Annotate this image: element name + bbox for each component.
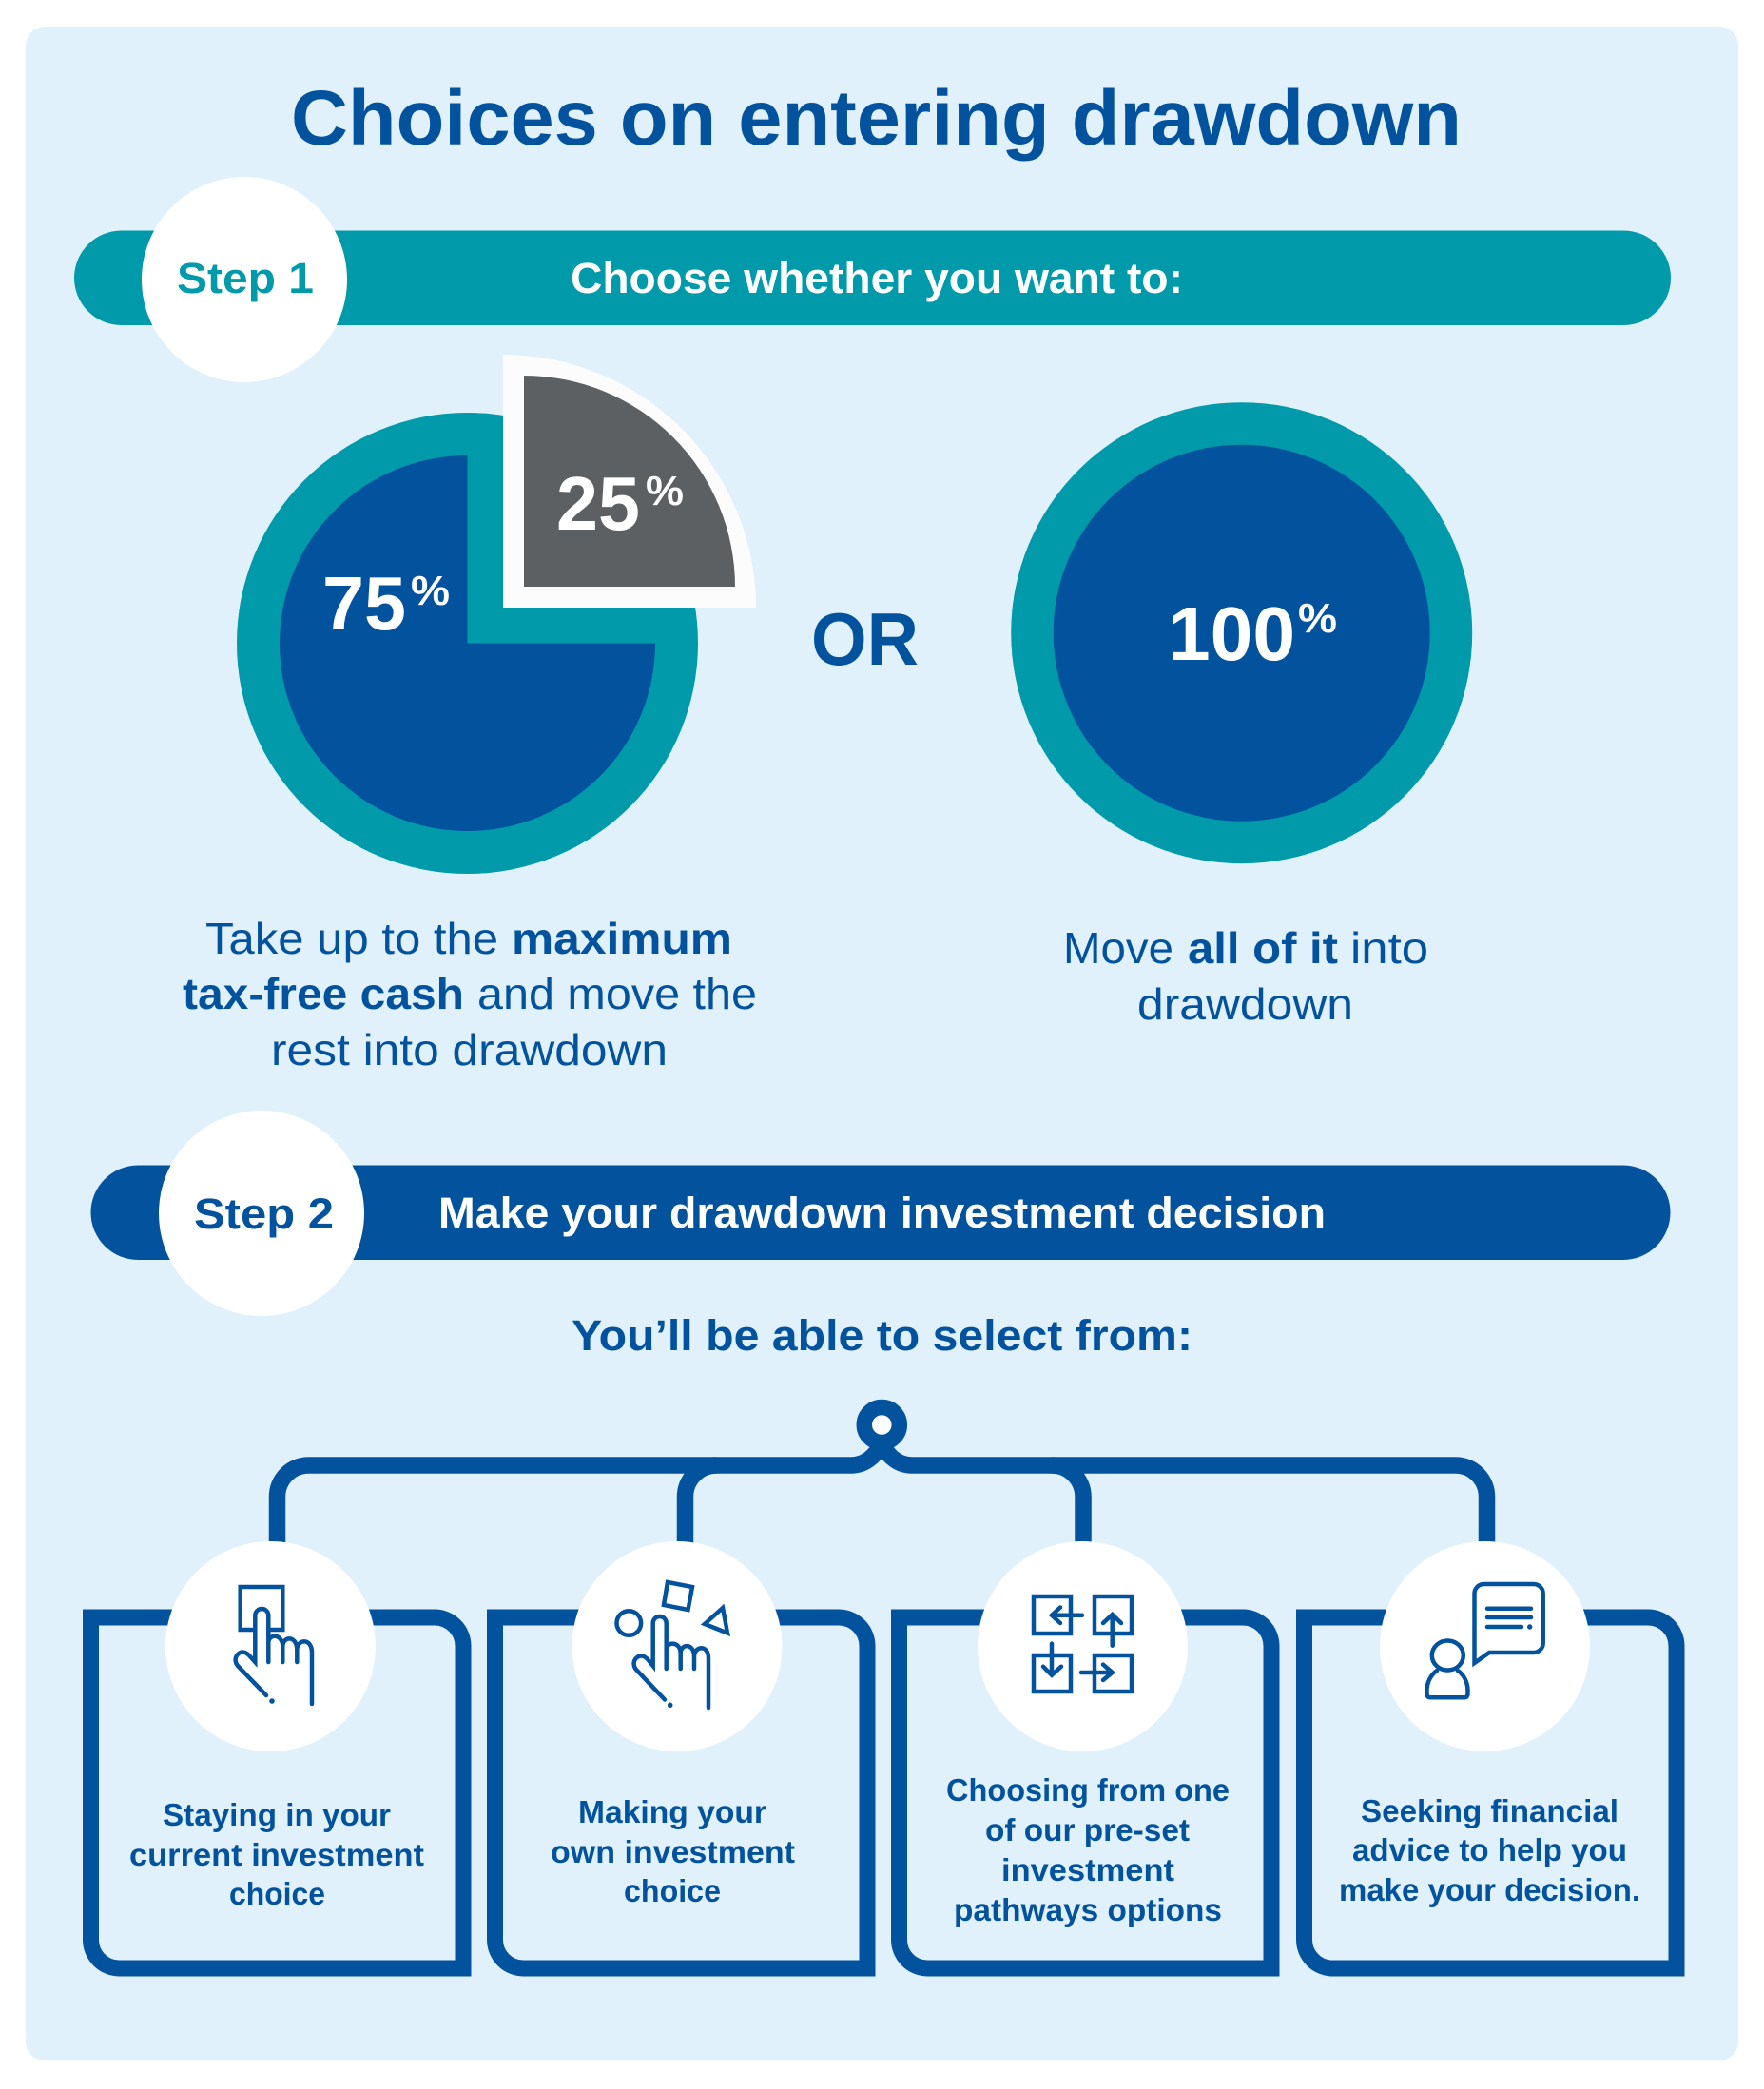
icon: person with speech bubble [1426, 1584, 1543, 1697]
card 3: pathways: investment [1001, 1852, 1174, 1887]
card 1: current investment: current investment [129, 1837, 424, 1872]
step 2 banner [91, 1111, 1670, 1316]
pie chart: 100%: % [1298, 595, 1337, 642]
card 4: financial advice [1305, 1541, 1677, 1968]
OR label: OR [811, 597, 919, 681]
subheading: You’ll be able to select from: [572, 1311, 1192, 1360]
text: move all option: Move [1063, 923, 1173, 973]
connector tree [278, 1407, 1487, 1545]
text: maximum tax-free cash option: and move the [477, 969, 757, 1018]
text: maximum tax-free cash option: Take up to the [205, 914, 498, 963]
step 1 banner: Choose whether you want to: [571, 254, 1183, 302]
card 3: pathways: pathways options [954, 1892, 1222, 1927]
step 2 banner: Make your drawdown investment decision [438, 1189, 1326, 1237]
card 3: pathways: Choosing from one [946, 1772, 1230, 1808]
pie chart: 100% [1011, 402, 1472, 863]
step 1 banner [74, 177, 1671, 382]
icon: four boxes with arrows [1034, 1596, 1132, 1692]
card 4: financial advice: advice to help you [1352, 1832, 1627, 1867]
text: maximum tax-free cash option: maximum [512, 914, 732, 963]
card 1: current investment: Staying in your [163, 1797, 391, 1832]
card 3: pathways [900, 1541, 1271, 1968]
icon: hand pressing button [236, 1587, 312, 1704]
card 2: own investment: own investment [551, 1834, 795, 1869]
pie chart: 75% and 25%: % [646, 468, 684, 514]
text: move all option: all of it [1188, 923, 1338, 973]
icon: hand with shapes [616, 1582, 727, 1708]
text: maximum tax-free cash option [183, 914, 757, 1074]
card 1: current investment: choice [229, 1876, 325, 1911]
text: move all option [1063, 923, 1428, 1029]
card 2: own investment [494, 1541, 867, 1968]
text: move all option: drawdown [1137, 979, 1353, 1029]
title: Choices on entering drawdown [291, 75, 1462, 162]
step 2 banner: Step 2 [194, 1190, 334, 1238]
card 4: financial advice: make your decision. [1339, 1872, 1640, 1907]
text: maximum tax-free cash option: rest into drawdown [271, 1025, 668, 1074]
card 3: pathways: of our pre-set [985, 1812, 1190, 1847]
card 2: own investment: choice [624, 1873, 721, 1908]
step 1 banner: Step 1 [177, 254, 314, 302]
pie chart: 75% and 25%: 75 [322, 561, 406, 646]
card 4: financial advice: Seeking financial [1361, 1793, 1619, 1828]
pie chart: 75% and 25%: 25 [556, 461, 640, 546]
pie chart: 100%: 100 [1168, 591, 1295, 676]
pie chart: 75% and 25% [237, 355, 756, 874]
card 2: own investment: Making your [578, 1794, 766, 1829]
pie chart: 75% and 25%: % [411, 568, 450, 614]
text: move all option: into [1350, 923, 1428, 973]
text: maximum tax-free cash option: tax-free cash [183, 969, 464, 1018]
card 1: current investment [91, 1541, 463, 1968]
